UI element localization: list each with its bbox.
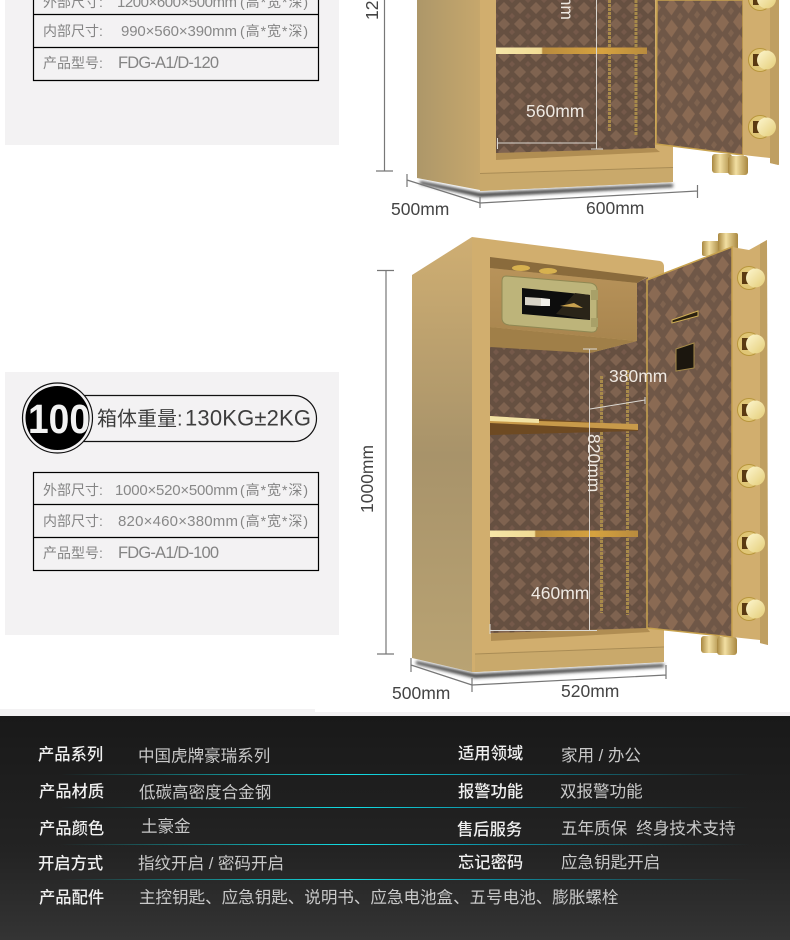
inner size row: 内部尺寸: [43,513,103,529]
outer size row: 外部尺寸: [43,482,103,498]
row: forgotten password: 忘记密码 [458,853,523,872]
weight text: 130KG±2KG [185,406,311,430]
row: material: 产品材质 [39,783,104,801]
lower shelf [490,530,638,537]
model row: 产品型号: [43,545,103,561]
row: material: 低碳高密度合金钢 [139,783,271,802]
row: colour: 土豪金 [141,816,191,836]
interior back wall [490,345,592,633]
interior back wall [496,0,597,153]
row: colour: 产品颜色 [39,820,104,838]
row: applicable area: 适用领域 [458,745,523,763]
label 600mm: 600mm [586,198,644,218]
outer size row: 1000×520×500mm [115,482,238,499]
row: applicable area [458,745,641,765]
bottom feet [701,636,737,655]
top compartment [490,268,637,341]
inner lock box [502,276,598,332]
interior side wall [590,277,648,632]
door inner panel [647,247,732,637]
safe lock holes [512,265,557,274]
inner size row: 820×460×380mm [118,513,238,530]
shelf [496,48,647,54]
row: product series [38,746,270,766]
model row: 产品型号: [43,55,103,71]
label 500mm: 500mm [391,199,449,219]
row: opening method: 指纹开启 / 密码开启 [138,854,284,873]
door inner panel [656,0,743,155]
row: product series: 产品系列 [38,746,103,764]
table: upper model specifications [34,0,318,80]
row: alarm: 双报警功能 [560,782,643,801]
interior side wall [597,0,655,150]
inner dimension lines [490,349,645,634]
footer edge strip [0,709,790,716]
inner size row: (高*宽*深) [240,513,308,529]
door nameplate [672,311,698,323]
row: material [39,783,271,802]
door edge [743,0,778,165]
model row: FDG-A1/D-120 [118,54,219,72]
row: after-sales: 售后服务 [457,821,522,839]
outer size row: (高*宽*深) [240,482,308,498]
door edge [732,240,768,645]
side wall [417,0,480,190]
panel: upper spec background [5,0,339,145]
dimensions: 120 model [362,0,698,219]
label 380mm: 380mm [609,366,667,386]
label 520mm: 520mm [561,681,619,701]
row: accessories: 主控钥匙、应急钥匙、说明书、应急电池盒、五号电池、膨胀螺栓 [139,888,618,907]
model row: FDG-A1/D-100 [118,544,219,562]
label 1000mm: 1000mm [357,445,377,513]
inner dimension lines [498,0,603,149]
front frame [480,0,673,191]
shelf rails [610,0,636,135]
label 560mm: 560mm [526,101,584,121]
row: opening method [38,854,284,873]
top bolts [702,233,738,256]
dimensions: 100 model [357,270,666,703]
badge: model 100 and weight [22,383,316,453]
panel: lower spec background [5,372,339,635]
row: product series: 中国虎牌豪瑞系列 [138,746,270,766]
label 500mm: 500mm [392,683,450,703]
door bolts [738,266,765,620]
side wall [412,237,472,672]
shelf rails [602,370,628,615]
panel: product parameters [0,716,790,940]
row: alarm [458,782,643,801]
label 460mm: 460mm [531,583,589,603]
row: applicable area: 家用 / 办公 [561,746,641,765]
door bolts [748,0,776,138]
row: forgotten password [458,853,660,872]
row: accessories: 产品配件 [39,889,104,907]
door label plate [676,343,694,371]
divider lines [60,774,750,880]
safe: 100 model product image [412,233,768,678]
inner size row: 990×560×390mm [121,23,237,40]
feet [712,154,732,173]
inner size row: 内部尺寸: [43,23,103,39]
safe: 120 model product image [417,0,779,197]
upper shelf [490,416,638,435]
row: opening method: 开启方式 [38,854,103,873]
label 820mm: 820mm [584,434,604,492]
row: forgotten password: 应急钥匙开启 [561,853,660,872]
row: after-sales [457,819,736,839]
badge number: 100 [28,396,90,442]
inner size row: (高*宽*深) [240,23,308,39]
front frame [472,237,664,672]
row: after-sales: 五年质保 终身技术支持 [561,819,736,838]
row: colour [39,816,191,838]
weight text: 箱体重量: [97,408,183,430]
table: lower model specifications [34,472,318,570]
row: alarm: 报警功能 [458,783,523,801]
